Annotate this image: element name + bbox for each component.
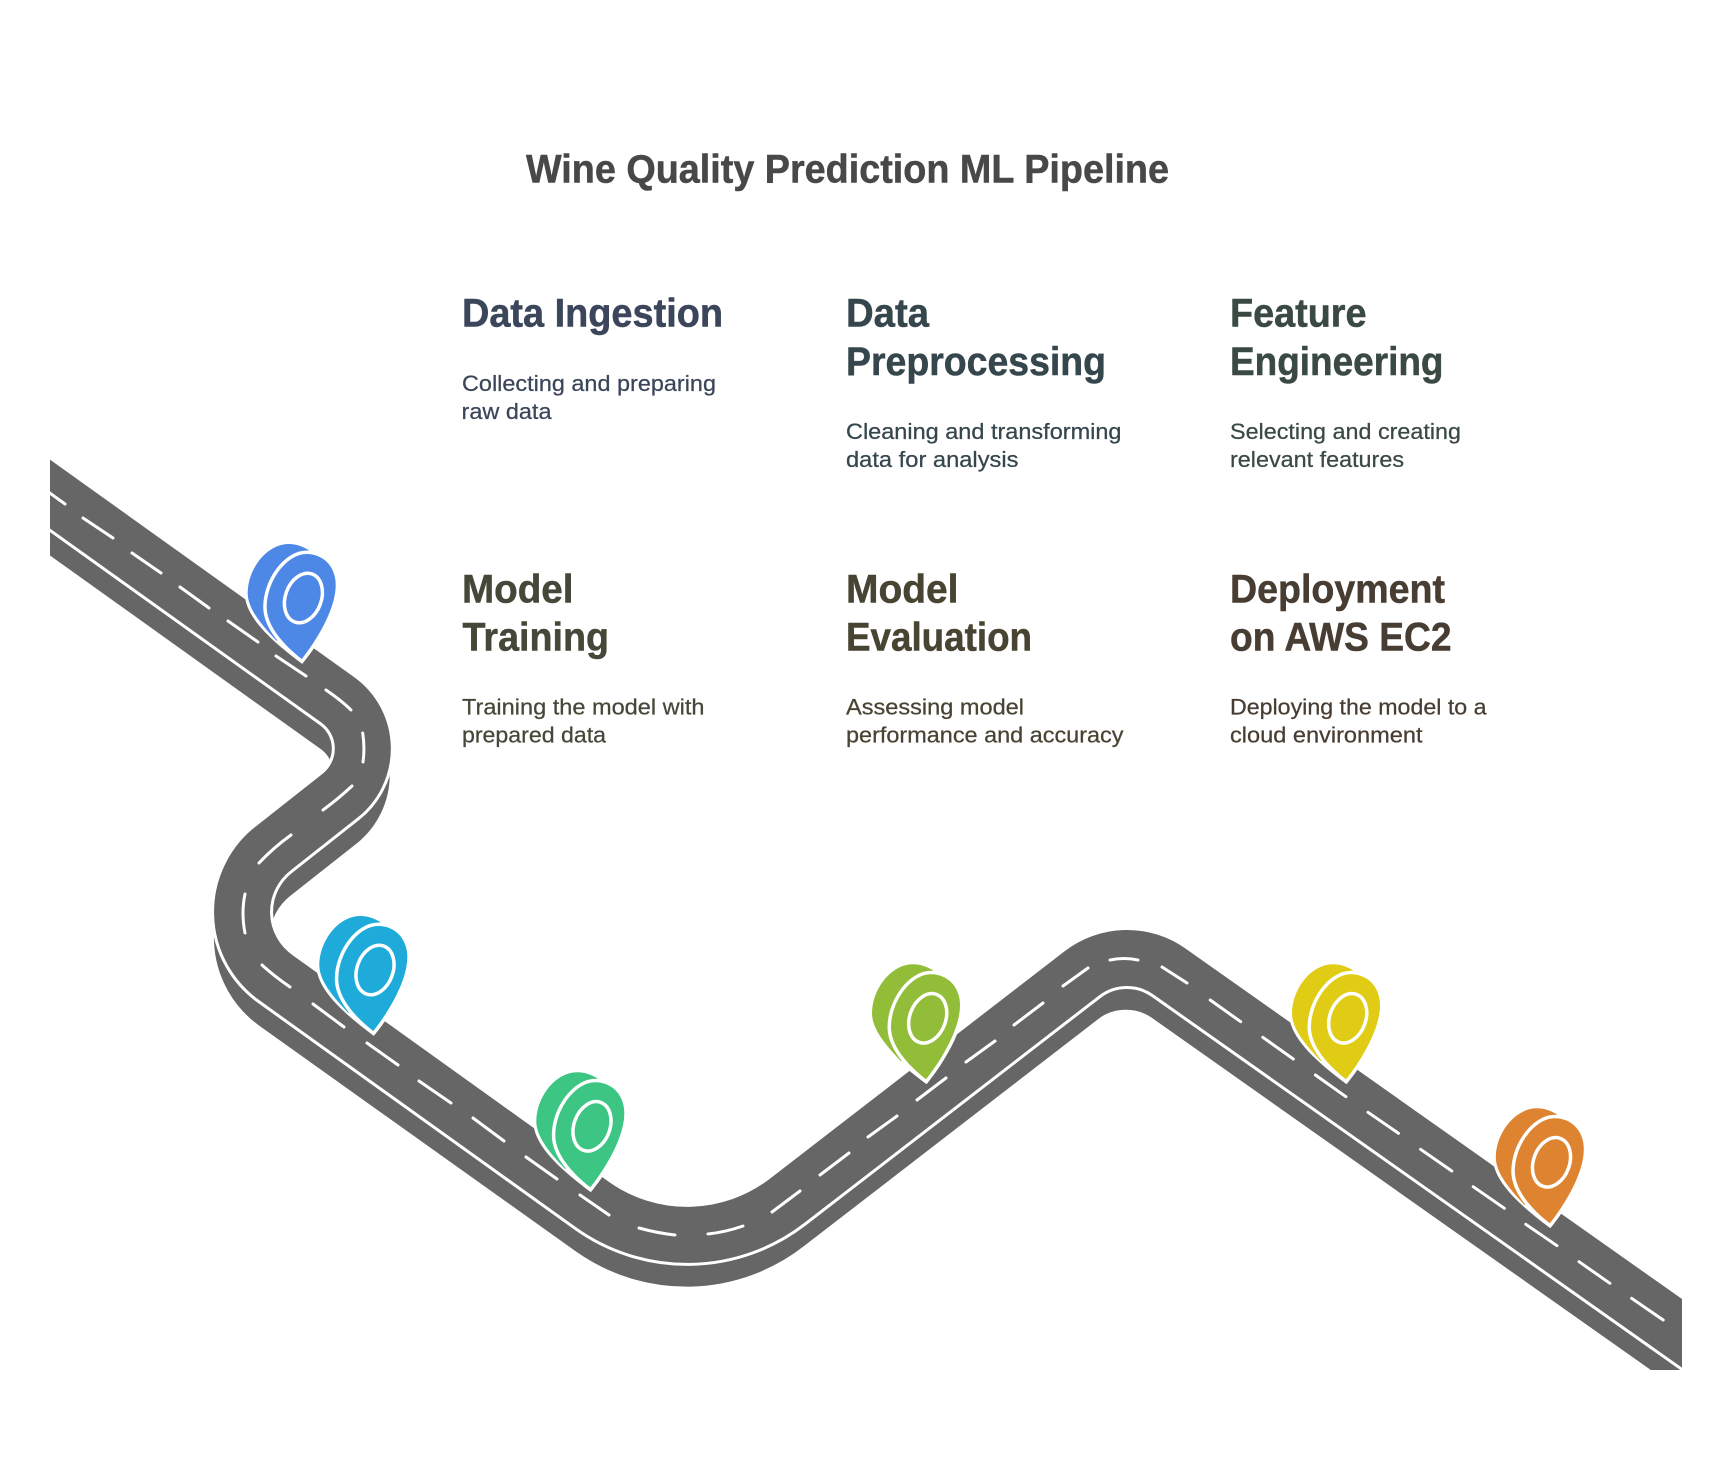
heading: Deployment: [1230, 568, 1445, 612]
pin: step 4 lime: [869, 964, 960, 1084]
road surface: [50, 460, 1682, 1368]
description: [846, 694, 1124, 748]
description: Collecting and preparing: [462, 371, 716, 396]
description: [462, 694, 704, 748]
road centre dashes: [40, 486, 1663, 1320]
description: Selecting and creating: [1230, 419, 1461, 444]
pin: step 1 blue: [245, 544, 336, 664]
step: Data Preprocessing: [846, 292, 1122, 472]
pin: step 2 cyan: [316, 916, 407, 1036]
road side edge: [50, 532, 1680, 1370]
heading: Feature: [1230, 292, 1366, 336]
heading: Training: [462, 616, 609, 660]
description: [462, 371, 716, 424]
description: [1230, 694, 1487, 748]
heading: Data: [846, 292, 930, 336]
heading: on AWS EC2: [1230, 616, 1452, 660]
description: performance and accuracy: [846, 722, 1124, 748]
description: [846, 419, 1122, 472]
step: Data Ingestion: [462, 292, 723, 424]
heading: [1230, 568, 1452, 660]
heading: Preprocessing: [846, 340, 1106, 384]
title: Wine Quality Prediction ML Pipeline: [526, 148, 1169, 192]
heading: [846, 292, 1106, 384]
pin: step 6 orange: [1493, 1108, 1584, 1228]
description: data for analysis: [846, 447, 1018, 472]
step: Deployment on AWS EC2: [1230, 568, 1487, 748]
pin: step 5 yellow: [1289, 964, 1380, 1084]
heading: [1230, 292, 1444, 384]
heading: Data Ingestion: [462, 292, 723, 336]
description: Assessing model: [846, 694, 1024, 719]
heading: Engineering: [1230, 340, 1444, 384]
heading: Evaluation: [846, 616, 1032, 660]
heading: [846, 568, 1032, 660]
step: Model Training: [462, 568, 704, 748]
description: Deploying the model to a: [1230, 694, 1487, 719]
heading: Model: [846, 568, 958, 612]
step: Model Evaluation: [846, 568, 1124, 748]
description: cloud environment: [1230, 722, 1422, 748]
description: [1230, 419, 1461, 472]
heading: [462, 568, 609, 660]
heading: Model: [462, 568, 574, 612]
road: [50, 460, 1682, 1370]
description: prepared data: [462, 722, 607, 748]
description: Training the model with: [462, 694, 704, 719]
description: raw data: [462, 399, 552, 424]
description: Cleaning and transforming: [846, 419, 1122, 444]
step: Feature Engineering: [1230, 292, 1461, 472]
road white edge line: [50, 528, 1682, 1370]
pin: step 3 green: [533, 1072, 624, 1192]
description: relevant features: [1230, 447, 1404, 472]
